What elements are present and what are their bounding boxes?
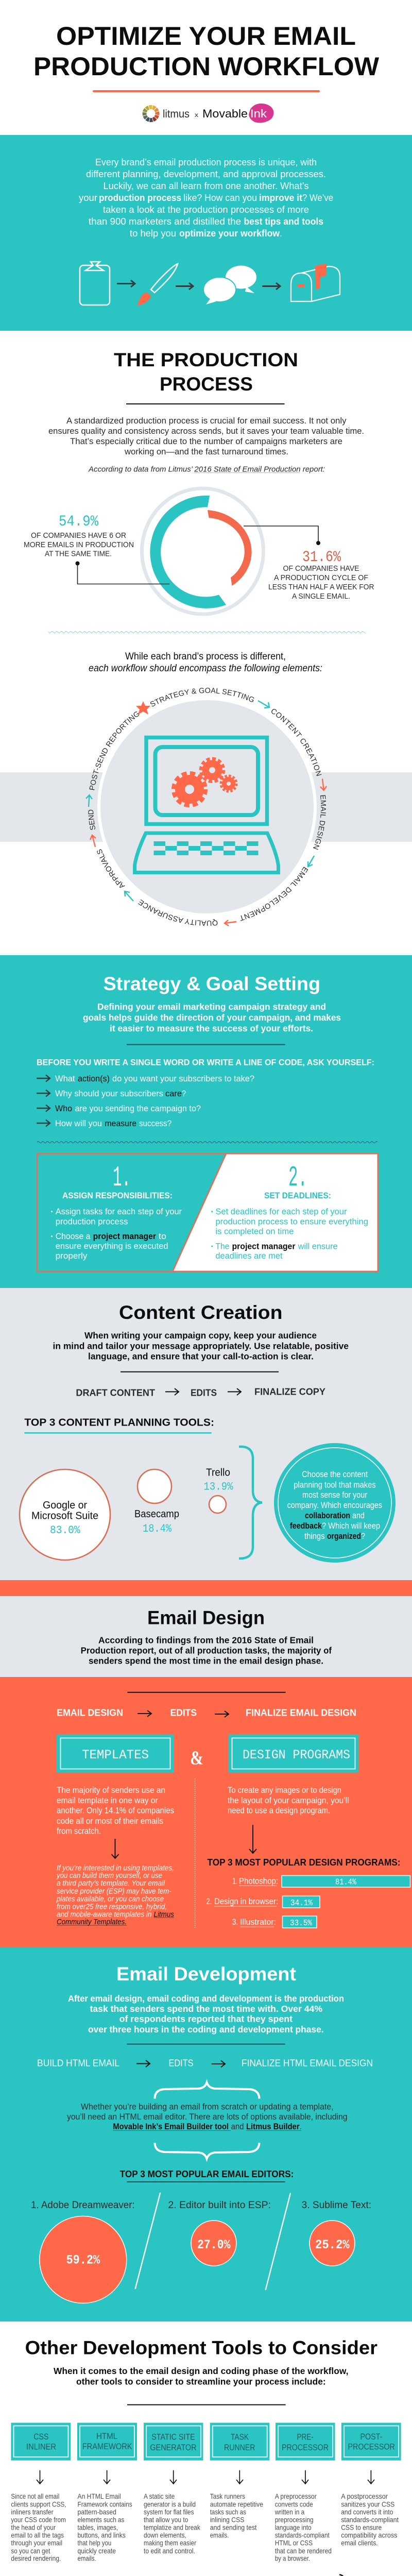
icon: speech bubbles [203, 266, 256, 304]
callout: 54.9% [24, 513, 169, 584]
description: HTML framework: elements such as [77, 2515, 124, 2523]
step 1: Choose a [56, 1231, 91, 1241]
intro text: production process [99, 193, 181, 203]
circular step labels: SEND [88, 810, 95, 830]
description: HTML framework: emails. [77, 2554, 96, 2563]
callout circle: choose the tool: feedback [290, 1521, 322, 1531]
editor text: you’ll need an HTML email editor. There are lots of options available, including [67, 2112, 347, 2122]
chart: email editors: 27.0% [197, 2238, 231, 2252]
donut chart [142, 488, 264, 614]
summary text: in mind and tailor your message appropriately. Use relatable, positive [53, 1341, 349, 1351]
intro text: Every brand’s email production process is unique, with [95, 157, 317, 167]
tool name boxes: GENERATOR [150, 2443, 197, 2452]
description: HTML framework: quickly create [77, 2547, 116, 2555]
title [33, 22, 380, 81]
description: preprocessor: HTML or CSS [275, 2538, 313, 2547]
editor text: . [300, 2122, 302, 2131]
tool name boxes: CSS [33, 2432, 48, 2442]
step 1: production process [56, 1217, 128, 1226]
callout circle: choose the tool: and [352, 1511, 365, 1520]
section: the production process [24, 349, 374, 674]
templates text: email template in one way or [57, 1795, 158, 1805]
description: postprocessor: email clients. [341, 2538, 378, 2547]
box: templates [57, 1734, 174, 1772]
circular step labels: POST-SEND REPORTING [90, 711, 139, 790]
summary text: goals helps guide the direction of your campaign, and makes [83, 1012, 341, 1023]
summary text [68, 1993, 344, 2035]
source note: According to data from Litmus’ 2016 State of Email Production report: [88, 465, 325, 474]
summary text: After email design, email coding and development is the production [68, 1993, 344, 2004]
intro text [48, 416, 364, 456]
bubble: Basecamp: Basecamp [134, 1509, 179, 1520]
bar chart: design programs: Illustrator: [240, 1918, 276, 1927]
bubble: Basecamp [134, 1469, 179, 1535]
callout: 31.6% [244, 526, 374, 601]
intro text: That’s especially critical due to the number of campaigns marketers are [70, 436, 342, 446]
templates note: you can build them yourself, or use [56, 1871, 162, 1880]
bar chart: design programs: Design in browser: [214, 1897, 278, 1906]
templates note: Litmus [153, 1910, 174, 1919]
question list: Why should your subscribers [55, 1089, 163, 1098]
templates note: from over25 free responsive, hybrid, [57, 1902, 167, 1911]
design programs text: To create any images or to design [228, 1785, 341, 1795]
bubble: Basecamp: 18.4% [143, 1522, 172, 1535]
intro text: to help you [130, 228, 176, 239]
intro text: ? We’ve [302, 193, 333, 203]
process flow: FINALIZE COPY [254, 1386, 325, 1397]
tool name boxes: STATIC SITE [151, 2432, 195, 2442]
process flow: EDITS [191, 1387, 217, 1398]
step 1: project manager [93, 1231, 156, 1241]
subheading: TOP 3 MOST POPULAR EMAIL EDITORS: [120, 2169, 294, 2179]
description: CSS inliner: clients support CSS, [11, 2500, 66, 2508]
subheading: TOP 3 CONTENT PLANNING TOOLS: [24, 1417, 214, 1428]
step 2: Set deadlines for each step of your [215, 1207, 347, 1216]
subheading: TOP 3 MOST POPULAR DESIGN PROGRAMS: [207, 1857, 401, 1868]
description: task runner: automate repetitive [210, 2500, 263, 2508]
callout: 54.9%: OF COMPANIES HAVE 6 OR [31, 531, 126, 540]
description: HTML framework: buttons, and links [77, 2531, 126, 2539]
question list: action(s) [78, 1074, 110, 1083]
step 1: properly [56, 1251, 88, 1261]
description: postprocessor [341, 2492, 399, 2547]
summary text: other tools to consider to streamline your process include: [76, 2376, 326, 2386]
description: HTML framework: that help you [77, 2538, 111, 2547]
tool name boxes: PROCESSOR [282, 2443, 329, 2452]
callout: 31.6%: A PRODUCTION CYCLE OF [274, 573, 368, 582]
title: OPTIMIZE YOUR EMAIL [56, 22, 356, 50]
callout: 31.6%: 31.6% [302, 549, 341, 566]
step 2: deadlines are met [215, 1251, 283, 1261]
question list: How will you [55, 1118, 102, 1128]
intro text: taken a look at the production processes of more [103, 205, 309, 215]
question list: measure [105, 1118, 136, 1128]
description: preprocessor: preprocessing [275, 2515, 314, 2523]
summary text: Defining your email marketing campaign strategy and [97, 1002, 326, 1012]
step 1: ensure everything is executed [56, 1241, 168, 1251]
tool name boxes: PROCESSOR [348, 2442, 395, 2452]
section: other development tools [11, 2337, 405, 2576]
intro text: optimize your workflow [179, 228, 280, 239]
description: preprocessor: by a browser. [275, 2554, 310, 2563]
intro text: . [280, 228, 282, 239]
heading: Email Development [116, 1963, 296, 1985]
step 1 [51, 1161, 182, 1261]
bar chart: design programs [206, 1875, 410, 1928]
bar chart: design programs: 33.5% [290, 1919, 313, 1928]
description: CSS inliner: your CSS code from [11, 2515, 66, 2523]
circular step labels: EMAIL DESIGN [313, 795, 327, 850]
templates text: The majority of senders use an [57, 1785, 165, 1795]
description: CSS inliner: so you can get [11, 2547, 50, 2555]
summary text [53, 1330, 349, 1362]
bubble: Google or Microsoft Suite [20, 1469, 110, 1560]
bar chart: design programs: 1. [233, 1876, 237, 1886]
bubble: Google or Microsoft Suite: 83.0% [50, 1524, 80, 1537]
process flow: BUILD HTML EMAIL [37, 2058, 119, 2068]
description: preprocessor: converts code [275, 2500, 313, 2508]
chart: email editors: 1. Adobe Dreamweaver: [31, 2200, 135, 2211]
description: task runner: and sending test [210, 2523, 257, 2531]
step 2: will ensure [298, 1241, 338, 1251]
section: intro [0, 135, 412, 331]
circular step labels: QUALITY ASSURANCE [138, 900, 217, 926]
design programs text [228, 1785, 349, 1816]
logos: litmus [163, 108, 190, 120]
description: CSS inliner: desired rendering. [11, 2554, 61, 2563]
bubble: Trello: Trello [206, 1467, 230, 1478]
logos: Ink [250, 107, 267, 120]
brace: top [154, 2082, 260, 2099]
question list: care [165, 1089, 182, 1098]
design programs text: the layout of your campaign, you’ll [228, 1795, 349, 1805]
description: CSS inliner: through your email [11, 2538, 62, 2547]
description: task runner: Task runners [210, 2492, 245, 2500]
templates text: code all or most of their emails [57, 1816, 163, 1826]
summary text [81, 1635, 332, 1666]
templates text: from scratch. [57, 1826, 101, 1836]
description: CSS inliner: inliners transfer [11, 2508, 54, 2516]
callout circle: choose the tool [274, 1443, 396, 1563]
intro text: A standardized production process is crucial for email success. It not only [66, 416, 347, 426]
step 1: Assign tasks for each step of your [56, 1207, 182, 1216]
icon: mailbox [291, 263, 340, 301]
callout circle: choose the tool: Choose the content [302, 1470, 368, 1479]
templates note: service provider (ESP) may have tem- [57, 1887, 171, 1895]
circular step labels: CONTENT CREATION [271, 709, 321, 776]
step 2: production process to ensure everything [215, 1217, 368, 1226]
tool name boxes: HTML [96, 2431, 117, 2441]
description: static site generator: to edit and control. [144, 2547, 195, 2555]
tool name boxes: POST- [360, 2432, 382, 2442]
description: static site generator: down elements, [144, 2531, 186, 2539]
description: task runner: inlining CSS [210, 2515, 244, 2523]
intro text: improve it [259, 193, 302, 203]
description: static site generator: system for flat files [144, 2508, 194, 2516]
callout circle: choose the tool: collaboration [305, 1511, 350, 1520]
description: CSS inliner: Since not all email [11, 2492, 59, 2500]
description: HTML framework: Framework contains [77, 2500, 132, 2508]
process flow [76, 1386, 325, 1398]
logos: Movable [202, 107, 248, 120]
description: static site generator: generator is a build [144, 2500, 196, 2508]
callout circle: choose the tool: most sense for your [302, 1490, 367, 1500]
callout circle: choose the tool: ? Which will keep [322, 1521, 380, 1531]
ampersand: & [190, 1748, 203, 1769]
bubble: Trello [203, 1467, 233, 1513]
templates text: another. Only 14.1% of companies [57, 1806, 174, 1816]
heading: Other Development Tools to Consider [25, 2337, 377, 2358]
callout: 31.6%: LESS THAN HALF A WEEK FOR [268, 583, 374, 591]
question list: ? [182, 1089, 186, 1098]
process flow: FINALIZE HTML EMAIL DESIGN [242, 2058, 373, 2068]
step 2: The [215, 1241, 229, 1251]
description: postprocessor: A postprocessor [341, 2492, 388, 2500]
chart: email editors [31, 2193, 371, 2303]
process flow: DRAFT CONTENT [76, 1387, 155, 1398]
design programs text: need to use a design program. [228, 1806, 330, 1816]
description: HTML framework: tables, images, [77, 2523, 118, 2531]
description: postprocessor: standards-compliant [341, 2515, 399, 2523]
step 1: to [159, 1231, 166, 1241]
question list: do you want your subscribers to take? [112, 1074, 254, 1083]
step 2 [211, 1161, 368, 1261]
summary text: language, and ensure that your call-to-action is clear. [88, 1351, 314, 1362]
title: PRODUCTION WORKFLOW [33, 52, 380, 81]
title underline [93, 90, 320, 92]
arrow [111, 1839, 118, 1858]
description: postprocessor: sanitizes your CSS [341, 2500, 394, 2508]
step 2: 2. [288, 1161, 307, 1194]
bubble: Trello: 13.9% [203, 1481, 233, 1494]
brace: bottom [154, 2143, 260, 2159]
intro text: like? How can you [183, 193, 257, 203]
intro text: your [79, 193, 97, 203]
intro text: than 900 marketers and distilled the [89, 216, 241, 227]
summary text: When it comes to the email design and coding phase of the workflow, [54, 2366, 348, 2376]
summary text [83, 1002, 341, 1033]
step 1: 1. [113, 1161, 131, 1194]
box: design programs [228, 1734, 358, 1772]
icon: clipboard [80, 262, 110, 305]
intro text: different planning, development, and approval processes. [86, 169, 326, 179]
brace [339, 2575, 349, 2576]
process flow: FINALIZE EMAIL DESIGN [246, 1708, 356, 1718]
section: email design details [0, 1677, 412, 1947]
description: CSS inliner: email to all the tags [11, 2531, 64, 2539]
summary text: task that senders spend the most time with. Over 44% [90, 2004, 322, 2014]
panel: responsibilities and deadlines [37, 1154, 378, 1272]
description: static site generator: making them easier [144, 2538, 196, 2547]
summary text: Production report, out of all production tasks, the majority of [81, 1646, 332, 1656]
arrow [176, 283, 193, 290]
templates note: If you’re interested in using templates, [57, 1863, 174, 1872]
box: templates: TEMPLATES [82, 1748, 149, 1762]
callout circle: choose the tool: planning tool that makes [294, 1481, 376, 1490]
bar chart: design programs: 3. [232, 1918, 238, 1927]
arrow [262, 283, 280, 290]
description: preprocessor: A preprocessor [275, 2492, 317, 2500]
heading: Strategy & Goal Setting [103, 973, 320, 994]
templates note: plates available, or you can choose [56, 1895, 164, 1904]
intro text: best tips and tools [244, 216, 323, 227]
templates note [56, 1863, 174, 1926]
description: preprocessor: written in a [274, 2508, 304, 2516]
callout: 31.6%: OF COMPANIES HAVE [283, 564, 359, 573]
circular step labels: EMAIL DEVELOPMENT [240, 867, 308, 921]
intro text: Luckily, we can all learn from one another. What’s [103, 181, 309, 191]
bar chart: design programs: 2. [206, 1897, 212, 1906]
process flow: EMAIL DESIGN [57, 1708, 123, 1718]
editor text: Movable Ink’s Email Builder tool [113, 2122, 229, 2131]
description: CSS inliner [11, 2492, 66, 2563]
arrow [249, 1825, 256, 1853]
description: task runner [210, 2492, 263, 2539]
summary text: of respondents reported that they spent [119, 2014, 293, 2024]
bubble: Google or Microsoft Suite: Microsoft Suite [31, 1511, 98, 1522]
arrow [117, 280, 135, 287]
section: hero header [0, 0, 412, 135]
callout: 54.9%: MORE EMAILS IN PRODUCTION [24, 540, 134, 549]
tool name boxes: PRE- [297, 2432, 314, 2442]
summary text: According to findings from the 2016 State of Email [98, 1635, 314, 1646]
question list [37, 1074, 254, 1128]
description: HTML framework: pattern-based [77, 2508, 116, 2516]
brace [239, 1447, 262, 1558]
section: content creation [0, 1288, 412, 1580]
section: workflow wheel [0, 687, 412, 926]
process flow: EDITS [170, 1708, 197, 1718]
description: task runner: emails. [210, 2531, 229, 2539]
chart: email editors: 2. Editor built into ESP: [168, 2200, 271, 2211]
circular step labels [88, 687, 327, 926]
callout: 54.9%: AT THE SAME TIME. [45, 550, 112, 558]
box: design programs: DESIGN PROGRAMS [243, 1748, 350, 1762]
summary text: When writing your campaign copy, keep your audience [84, 1330, 317, 1341]
process flow [57, 1708, 356, 1718]
process flow [37, 2058, 373, 2068]
tool name boxes: FRAMEWORK [82, 2442, 132, 2451]
editor text: and [231, 2122, 244, 2131]
heading: THE PRODUCTION [114, 349, 298, 370]
chart: email editors: 59.2% [66, 2252, 100, 2268]
tool descriptions [11, 2492, 399, 2563]
heading: PROCESS [160, 374, 253, 395]
description: HTML framework [77, 2492, 132, 2563]
callout circle: choose the tool: things [304, 1532, 325, 1541]
description: postprocessor: CSS to ensure [341, 2523, 382, 2531]
process flow: EDITS [169, 2058, 194, 2068]
summary text [54, 2366, 348, 2386]
step arrows [86, 701, 327, 926]
description: task runner: tasks such as [210, 2508, 246, 2516]
lead-in text: each workflow should encompass the following elements: [89, 663, 322, 674]
section: email development [0, 1947, 412, 2321]
callout: 54.9%: 54.9% [59, 513, 99, 531]
templates text [57, 1785, 174, 1836]
templates note: and mobile-aware templates in [57, 1910, 151, 1919]
question heading: BEFORE YOU WRITE A SINGLE WORD OR WRITE A LINE OF CODE, ASK YOURSELF: [37, 1058, 374, 1067]
circular step labels: APPROVALS [97, 849, 125, 888]
editor text: Litmus Builder [246, 2122, 300, 2131]
icon: star [136, 701, 150, 715]
description: static site generator: A static site [144, 2492, 175, 2500]
section: email design heading [0, 1580, 412, 1677]
description: preprocessor: language into [275, 2523, 312, 2531]
summary text: it easier to measure the success of your efforts. [110, 1023, 313, 1033]
heading: Content Creation [119, 1302, 282, 1323]
bar chart: design programs: Photoshop: [239, 1876, 278, 1886]
description: static site generator: templatize and break [144, 2523, 201, 2531]
templates note: Community Templates. [57, 1918, 127, 1926]
description: preprocessor [274, 2492, 332, 2563]
question list: are you sending the campaign to? [75, 1104, 201, 1113]
heading [114, 349, 298, 395]
callout circle: choose the tool: ? [361, 1532, 365, 1541]
callout circle: choose the tool: company. Which encourages [287, 1501, 382, 1510]
step 2: project manager [232, 1241, 296, 1251]
intro text: ensures quality and consistency across sends, but it saves your team valuable time. [48, 426, 364, 436]
callout circle: choose the tool: organized [327, 1532, 361, 1541]
description: HTML framework: An HTML Email [77, 2492, 121, 2500]
question list: success? [139, 1118, 171, 1128]
lead-in text: While each brand’s process is different, [125, 651, 286, 662]
tool name boxes: TASK [231, 2432, 249, 2442]
callout: 31.6%: A SINGLE EMAIL. [292, 592, 350, 601]
templates note: a third party’s template. Your email [57, 1879, 165, 1888]
icon: paint brush [136, 264, 178, 306]
description: postprocessor: and converts it into [341, 2508, 393, 2516]
tool name boxes [11, 2422, 401, 2461]
intro text: working on—and the fast turnaround times. [124, 447, 288, 456]
question list: Who [55, 1104, 72, 1113]
description: preprocessor: that can be rendered [275, 2547, 332, 2555]
tool name boxes: RUNNER [224, 2443, 255, 2452]
step 2: SET DEADLINES: [264, 1191, 331, 1200]
question list: What [55, 1074, 75, 1083]
editor text [67, 2102, 347, 2131]
circular step labels: STRATEGY & GOAL SETTING [150, 687, 254, 707]
summary text: senders spend the most time in the email design phase. [89, 1656, 323, 1666]
lead-in text [89, 651, 322, 674]
logos: x [195, 111, 198, 118]
description: CSS inliner: the head of your [11, 2523, 56, 2531]
chart: email editors: 25.2% [315, 2238, 350, 2252]
heading: Email Design [147, 1607, 265, 1629]
intro text [79, 157, 333, 239]
summary text: over three hours in the coding and development phase. [88, 2024, 324, 2035]
description: static site generator: that allow you to [144, 2515, 188, 2523]
icon: laptop with gears [135, 738, 278, 873]
description: preprocessor: standards-compliant [275, 2531, 330, 2539]
down arrows [37, 2470, 374, 2484]
bar chart: design programs: 34.1% [290, 1899, 313, 1908]
tool name boxes: INLINER [26, 2442, 56, 2452]
step 1: ASSIGN RESPONSIBILITIES: [62, 1191, 173, 1200]
bar chart: design programs: 81.4% [335, 1877, 357, 1887]
logos [142, 104, 273, 123]
description: postprocessor: compatibility across [341, 2531, 397, 2539]
description: static site generator [144, 2492, 201, 2555]
chart: email editors: 3. Sublime Text: [302, 2200, 371, 2211]
section: strategy and goal setting [0, 955, 412, 1288]
bubble: Google or Microsoft Suite: Google or [43, 1500, 87, 1511]
editor text: Whether you’re building an email from scratch or updating a template, [81, 2102, 334, 2112]
step 2: is completed on time [215, 1226, 294, 1236]
